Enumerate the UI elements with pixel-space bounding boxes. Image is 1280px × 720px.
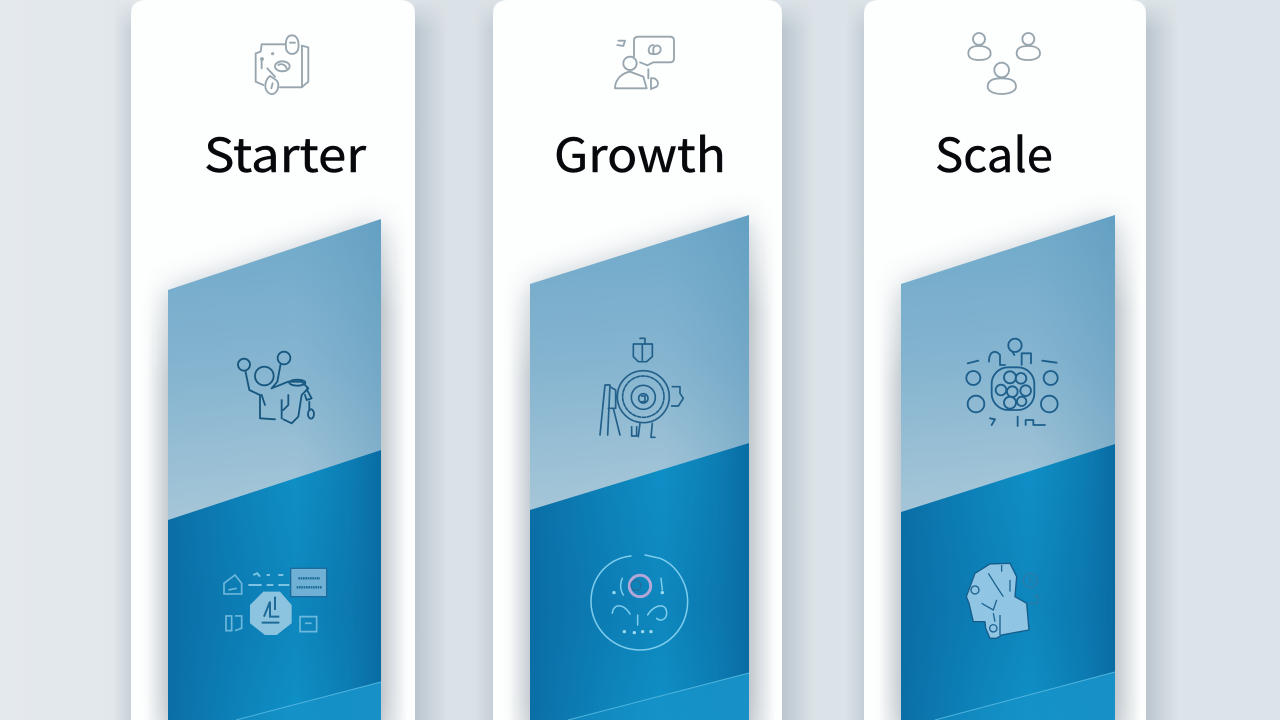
card: Growth bbox=[475, 0, 814, 720]
icon: three people bbox=[968, 33, 1040, 94]
icon: dashboard cluster bbox=[224, 568, 327, 635]
icon: target dial bbox=[600, 338, 683, 437]
panel: Scale tier bbox=[879, 215, 1141, 720]
icon: head with book bbox=[966, 563, 1038, 638]
heading: Scale: Scale bbox=[935, 117, 1053, 186]
heading: Growth: Growth bbox=[554, 117, 726, 186]
icon: circular cycle bbox=[591, 555, 688, 650]
icon: map with pins bbox=[256, 35, 308, 94]
icon: figure with balloons bbox=[238, 352, 314, 423]
panel: Growth tier bbox=[508, 215, 775, 720]
panel: Starter tier bbox=[146, 219, 407, 720]
card: Scale bbox=[846, 0, 1178, 720]
card: Starter bbox=[113, 0, 447, 720]
heading: Starter: Starter bbox=[204, 117, 367, 186]
icon: person with speech bubble bbox=[615, 37, 674, 89]
icon: team hub bbox=[966, 339, 1058, 426]
